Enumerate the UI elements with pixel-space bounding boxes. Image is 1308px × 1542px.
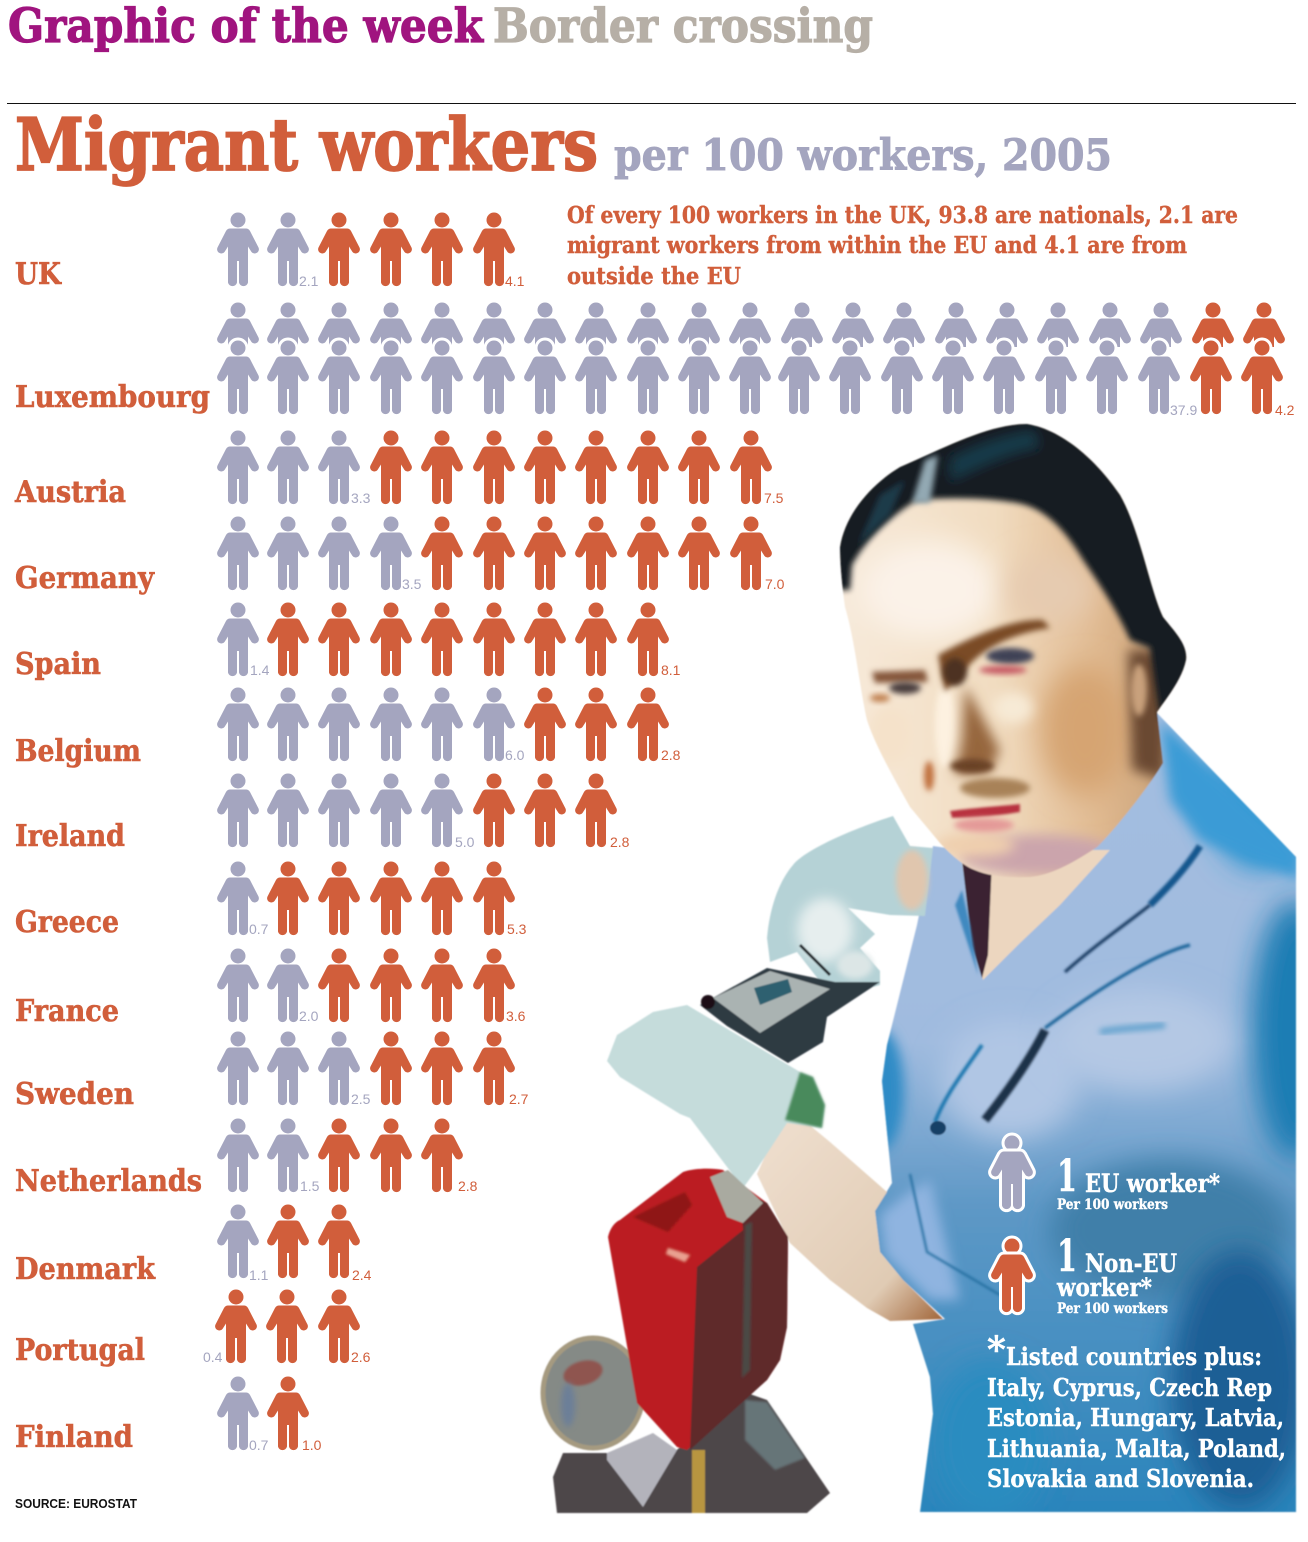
title [15,102,1112,187]
row: Greece: 5.3 [507,921,527,937]
row: Belgium [15,688,681,769]
row: Germany [15,516,785,596]
legend: EU worker: EU worker* [1085,1169,1220,1198]
row: France: 3.6 [506,1008,526,1024]
row: Portugal: Portugal [15,1333,145,1368]
legend: Non-EU worker: Non-EU [1085,1249,1177,1278]
kicker: Graphic of the week: Graphic of the week [8,0,484,54]
row: Ireland: 5.0 [455,834,475,850]
row: Portugal [15,1290,371,1368]
row: Sweden [15,1032,529,1112]
row: Austria: 3.3 [351,490,371,506]
explanatory note: outside the EU [567,262,741,290]
row: Germany: Germany [15,561,155,596]
row: Austria: Austria [14,475,126,510]
row: UK: UK [15,257,62,292]
footnote: Listed countries plus: [1006,1342,1262,1371]
row: Spain: 8.1 [661,662,681,678]
hair [830,410,1200,720]
lower arm [757,1123,943,1321]
row: Ireland [15,774,630,854]
legend: Non-EU worker: 1 [1057,1231,1077,1282]
row: Greece: Greece [15,905,119,940]
row: Portugal: 2.6 [351,1349,371,1365]
device [700,968,880,1063]
head [830,410,1200,885]
row: France [15,948,526,1029]
icon: Non-EU worker [991,1238,1033,1312]
row: Denmark: 2.4 [352,1267,372,1283]
row: Finland: 0.7 [249,1437,269,1453]
row: Greece [15,862,527,940]
footnote: * [987,1329,1006,1371]
row: Spain [15,602,681,682]
legend: EU worker: 1 [1057,1151,1077,1202]
footnote: Slovakia and Slovenia. [987,1464,1254,1493]
explanatory note [567,201,1238,290]
lower glove [607,1005,825,1188]
row: Germany: 3.5 [402,576,422,592]
row: Austria: 7.5 [764,490,784,506]
row: Portugal: 0.4 [203,1349,223,1365]
footnote [987,1329,1286,1493]
row: Sweden: Sweden [15,1077,134,1112]
row: Spain: Spain [15,647,101,682]
row: UK: 2.1 [299,273,319,289]
legend: Non-EU worker [991,1231,1177,1317]
row: Denmark [15,1204,372,1287]
row: Luxembourg [15,302,1295,418]
white halos [228,338,1272,358]
kicker: Border crossing: Border crossing [493,0,873,54]
row: Luxembourg: 37.9 [1170,402,1197,418]
hand on jug [710,1170,763,1223]
legend: EU worker [991,1136,1220,1213]
neck [960,850,1110,980]
row: Austria [14,430,784,510]
footnote: Italy, Cyprus, Czech Rep [987,1373,1272,1402]
row: Netherlands: 1.5 [300,1178,320,1194]
row: Ireland: 2.8 [610,834,630,850]
row: Luxembourg: Luxembourg [15,380,210,415]
row: France: 2.0 [299,1008,319,1024]
row: Spain: 1.4 [250,662,270,678]
row: Sweden: 2.5 [351,1091,371,1107]
row: Luxembourg: 4.2 [1275,402,1295,418]
photo: cleaner with floor polisher [543,410,1308,1520]
red jug [608,1169,788,1450]
row: Netherlands: Netherlands [15,1164,202,1199]
source: SOURCE: EUROSTAT [15,1497,137,1511]
floor machine base [553,1393,830,1513]
subtitle: per 100 workers, 2005 [614,131,1112,181]
row: Belgium: 6.0 [505,747,525,763]
row: UK: 4.1 [505,273,525,289]
shirt [860,700,1308,1520]
row: Belgium: 2.8 [661,747,681,763]
icon: EU worker [991,1136,1033,1209]
row: France: France [15,994,119,1029]
row: Ireland: Ireland [15,819,125,854]
row: Sweden: 2.7 [509,1091,529,1107]
explanatory note: migrant workers from within the EU and 4.1 are from [567,231,1187,259]
row: UK [15,212,525,292]
row: Greece: 0.7 [249,921,269,937]
legend: Non-EU worker: Per 100 workers [1057,1301,1168,1317]
row: Belgium: Belgium [15,734,141,769]
collar and placket lines [1150,846,1200,905]
legend: Non-EU worker: worker* [1056,1273,1152,1302]
front row of figures [217,340,1283,414]
title: Migrant workers: Migrant workers [15,102,598,187]
row: Netherlands: 2.8 [458,1178,478,1194]
row: Netherlands [15,1118,478,1199]
legend: EU worker: Per 100 workers [1057,1197,1168,1213]
row: Germany: 7.0 [765,576,785,592]
row: Finland: 1.0 [302,1437,322,1453]
back row of figures [217,302,1285,347]
row: Finland: Finland [15,1420,133,1455]
upper glove [767,816,933,998]
row: Denmark: Denmark [15,1252,156,1287]
row: Denmark: 1.1 [249,1267,269,1283]
header: graphic of the week [8,0,873,54]
row: Finland [15,1376,322,1455]
